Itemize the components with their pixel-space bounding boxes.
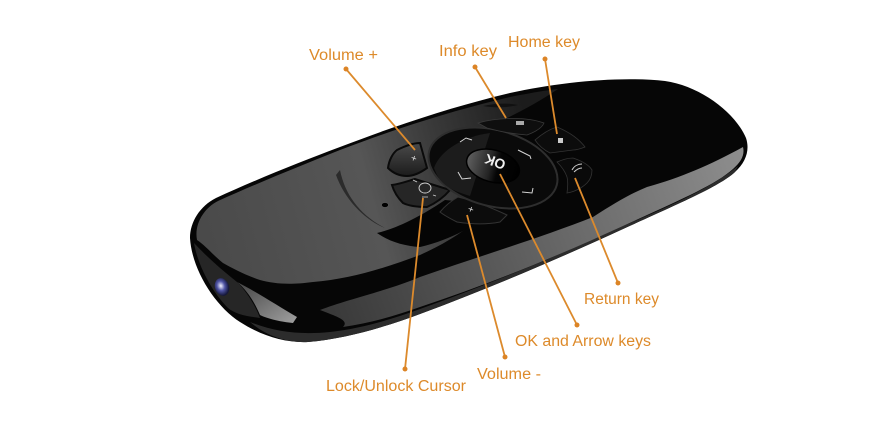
callout: OK and Arrow keys xyxy=(500,174,651,350)
info key slit xyxy=(483,104,518,107)
key: volume minus: + xyxy=(466,202,476,215)
callout: Return key: Return key xyxy=(584,291,659,308)
key: return xyxy=(557,158,592,193)
key: OK: OK xyxy=(482,151,508,173)
front bezel xyxy=(194,243,260,318)
small hole xyxy=(382,202,388,208)
key: volume plus xyxy=(388,143,427,176)
key: volume plus: + xyxy=(409,151,419,164)
callout: Volume - xyxy=(467,215,541,383)
bottom rim xyxy=(250,166,738,342)
key: volume minus xyxy=(440,197,507,224)
callout: Home key xyxy=(508,34,580,134)
callout: Volume +: Volume + xyxy=(309,47,378,64)
callout: Info key xyxy=(439,43,506,118)
callout: Home key: Home key xyxy=(508,34,580,51)
callout: Lock/Unlock Cursor: Lock/Unlock Cursor xyxy=(326,378,466,395)
button cluster xyxy=(388,114,592,224)
remote control body xyxy=(190,79,748,342)
key: arrow ring xyxy=(419,114,567,222)
black wedge reflection xyxy=(377,200,495,247)
callout: Volume + xyxy=(309,47,415,150)
callout: OK and Arrow keys: OK and Arrow keys xyxy=(515,333,651,350)
key: home xyxy=(535,127,585,153)
key: lock cursor xyxy=(392,179,450,207)
callout: Lock/Unlock Cursor xyxy=(326,198,466,395)
key: OK xyxy=(463,144,523,188)
key: info xyxy=(478,118,544,135)
lower glossy band xyxy=(320,147,744,327)
body shell xyxy=(190,79,748,342)
front light wedge xyxy=(237,282,297,323)
upper glossy reflection xyxy=(196,89,558,284)
callout: Info key: Info key xyxy=(439,43,497,60)
LED xyxy=(212,276,232,298)
button well edge xyxy=(336,170,385,228)
callout: Return key xyxy=(575,178,659,308)
callout: Volume -: Volume - xyxy=(477,366,541,383)
